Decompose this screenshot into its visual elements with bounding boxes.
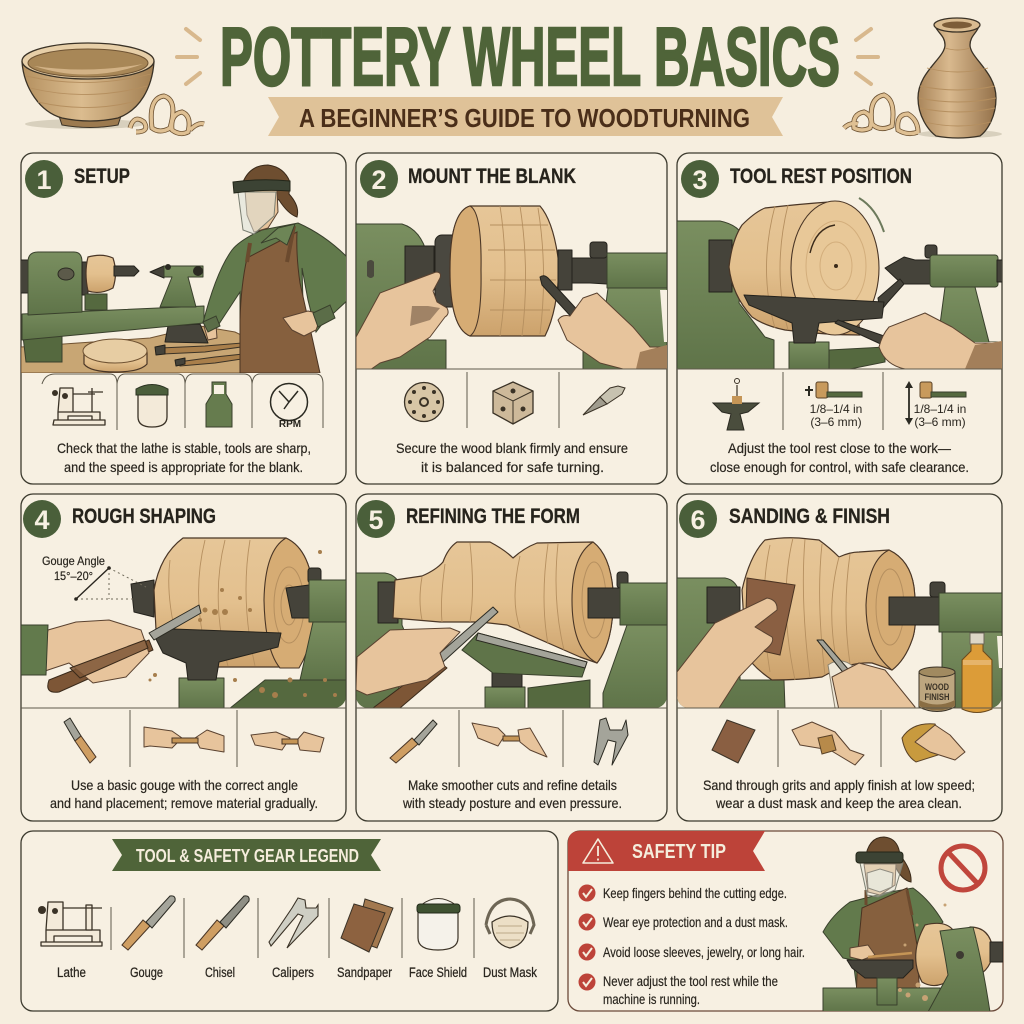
- icon: clearance measure 2: (3–6 mm): [914, 415, 966, 429]
- legend item: lathe: Lathe: [57, 965, 86, 980]
- icon: hand wiping finish: [902, 724, 965, 762]
- icon: clearance measure 2: [905, 381, 966, 429]
- prohibition sign: [941, 846, 985, 890]
- icon: apron: [206, 382, 232, 427]
- panel: safety tip: [568, 831, 1003, 1012]
- description: close enough for control, with safe clearance.: [710, 459, 969, 475]
- step number: 1: [36, 165, 52, 195]
- illustration: turner at the lathe: [823, 837, 1003, 1012]
- step number: [357, 500, 395, 538]
- icon: gouge: [64, 718, 96, 763]
- description: Adjust the tool rest close to the work—: [728, 440, 951, 456]
- description: Secure the wood blank firmly and ensure: [396, 440, 628, 456]
- legend item: chisel: [196, 896, 249, 980]
- panel: step 3 tool rest position: [677, 153, 1005, 484]
- icon: hand sanding: [792, 722, 864, 765]
- description: [710, 440, 969, 475]
- icon row: [356, 369, 667, 428]
- description: Check that the lathe is stable, tools are sharp,: [57, 440, 311, 456]
- icon row: [677, 708, 1002, 767]
- icon row: [356, 708, 667, 767]
- icon row: [21, 708, 346, 767]
- panel: step 1 setup: [20, 153, 350, 484]
- icon: chisel: [390, 720, 437, 763]
- icon row: [677, 369, 1002, 430]
- step number: [23, 500, 61, 538]
- heading: ROUGH SHAPING: [72, 505, 216, 528]
- icon: sandpaper: [712, 720, 755, 763]
- heading: REFINING THE FORM: [406, 505, 580, 528]
- icon: lathe: [52, 388, 105, 425]
- gouge angle diagram: [42, 554, 146, 601]
- legend item: calipers: [269, 898, 318, 980]
- illustration: turned wooden bowl: [22, 43, 154, 129]
- panel frame: [677, 153, 1002, 484]
- panel frame: [568, 831, 1003, 1011]
- icon: clearance measure 1: 1/8–1/4 in: [810, 402, 862, 416]
- icon: clearance measure 1: [805, 382, 862, 429]
- decorative burst left: [177, 29, 200, 84]
- icon: RPM gauge: [270, 384, 308, 430]
- heading: SETUP: [74, 165, 130, 188]
- description: Sand through grits and apply finish at low speed;: [703, 777, 975, 793]
- step number: 3: [692, 165, 708, 195]
- illustration: finish can and oil bottle: WOOD: [925, 682, 949, 692]
- description: it is balanced for safe turning.: [421, 459, 604, 475]
- legend item: dust mask: Dust Mask: [483, 965, 537, 980]
- panel: tool and safety gear legend: [21, 831, 558, 1011]
- icon: clearance measure 1: (3–6 mm): [810, 415, 862, 429]
- illustration: rough gouge cut: [21, 538, 346, 709]
- icon: face shield: [136, 384, 168, 427]
- description: Make smoother cuts and refine details: [408, 777, 617, 793]
- legend item: sandpaper: Sandpaper: [337, 965, 392, 980]
- step number: [679, 500, 717, 538]
- description: [50, 777, 318, 811]
- dividers: [111, 898, 474, 958]
- illustration: refining cut: [356, 542, 667, 708]
- heading: MOUNT THE BLANK: [408, 165, 576, 188]
- panel: step 4 rough shaping: [21, 494, 346, 821]
- legend item: dust mask: [483, 899, 537, 980]
- illustration: wood shavings left: [130, 96, 204, 134]
- description: with steady posture and even pressure.: [402, 795, 622, 811]
- heading: SANDING & FINISH: [729, 505, 890, 528]
- checklist: [578, 884, 805, 1007]
- illustration: finish can and oil bottle: [919, 633, 992, 712]
- description: Use a basic gouge with the correct angle: [71, 777, 298, 793]
- safety banner: SAFETY TIP: [632, 841, 726, 863]
- gouge angle diagram: 15°–20°: [54, 569, 93, 583]
- panel frame: [356, 153, 667, 484]
- icon: RPM gauge: RPM: [279, 419, 301, 430]
- icon: faceplate: [404, 382, 444, 422]
- icon: chuck: [493, 382, 533, 424]
- icon: clearance measure 2: 1/8–1/4 in: [914, 402, 966, 416]
- legend item: face shield: Face Shield: [409, 965, 467, 980]
- icon: hand placement 1: [144, 727, 224, 752]
- panel frame: [21, 831, 558, 1011]
- legend item: gouge: [122, 896, 175, 980]
- legend banner: [112, 839, 381, 871]
- step number: 2: [371, 165, 387, 195]
- illustration: wood shavings right: [844, 95, 918, 134]
- legend item: chisel: Chisel: [205, 965, 235, 980]
- description: wear a dust mask and keep the area clean.: [715, 795, 962, 811]
- checklist: Avoid loose sleeves, jewelry, or long hair.: [603, 944, 805, 960]
- icon: hand placement 2: [251, 732, 324, 752]
- checklist: Never adjust the tool rest while the: [603, 973, 778, 989]
- step number: [25, 160, 63, 198]
- step number: [360, 160, 398, 198]
- illustration: tool rest at the blank: [677, 198, 1005, 369]
- panel frame: [677, 494, 1002, 821]
- icon: live center: [583, 386, 625, 415]
- step number: 4: [34, 505, 50, 535]
- legend banner: TOOL & SAFETY GEAR LEGEND: [136, 846, 359, 866]
- step number: 5: [368, 505, 384, 535]
- illustration: mounting the blank: [356, 206, 668, 370]
- legend item: sandpaper: [337, 899, 393, 980]
- panel: step 2 mount the blank: [356, 153, 668, 484]
- subtitle ribbon: [268, 97, 783, 136]
- panel frame: [21, 494, 346, 821]
- checklist: Keep fingers behind the cutting edge.: [603, 885, 787, 901]
- illustration: sanding with finish: [677, 538, 1003, 710]
- checklist: machine is running.: [603, 991, 700, 1007]
- subtitle ribbon: A BEGINNER’S GUIDE TO WOODTURNING: [299, 103, 750, 133]
- panel: step 5 refining the form: [356, 494, 667, 821]
- description: and the speed is appropriate for the blank.: [64, 459, 303, 475]
- gouge angle diagram: Gouge Angle: [42, 554, 105, 568]
- legend item: lathe: [38, 902, 102, 980]
- panel frame: [21, 153, 346, 484]
- safety banner: [568, 831, 765, 871]
- heading: TOOL REST POSITION: [730, 165, 912, 188]
- description: [703, 777, 975, 811]
- step number: 6: [690, 505, 706, 535]
- checklist: Wear eye protection and a dust mask.: [603, 914, 788, 930]
- panel frame: [356, 494, 667, 821]
- illustration: turned wooden vase: [918, 18, 1002, 138]
- legend item: face shield: [409, 898, 467, 980]
- decorative burst right: [856, 29, 878, 84]
- illustration: lathe and turner: [20, 165, 350, 373]
- description: and hand placement; remove material gradually.: [50, 795, 318, 811]
- legend item: calipers: Calipers: [272, 965, 314, 980]
- legend item: gouge: Gouge: [130, 965, 163, 980]
- panel: step 6 sanding and finish: [677, 494, 1003, 821]
- icon: hands on tool: [472, 723, 547, 757]
- description: [57, 440, 311, 475]
- icon row: [42, 374, 323, 430]
- description: [402, 777, 622, 811]
- illustration: finish can and oil bottle: FINISH: [924, 692, 950, 702]
- description: [396, 440, 628, 475]
- icon: tool rest: [713, 378, 759, 430]
- step number: [681, 160, 719, 198]
- header: [22, 10, 1002, 138]
- icon: calipers: [594, 718, 628, 765]
